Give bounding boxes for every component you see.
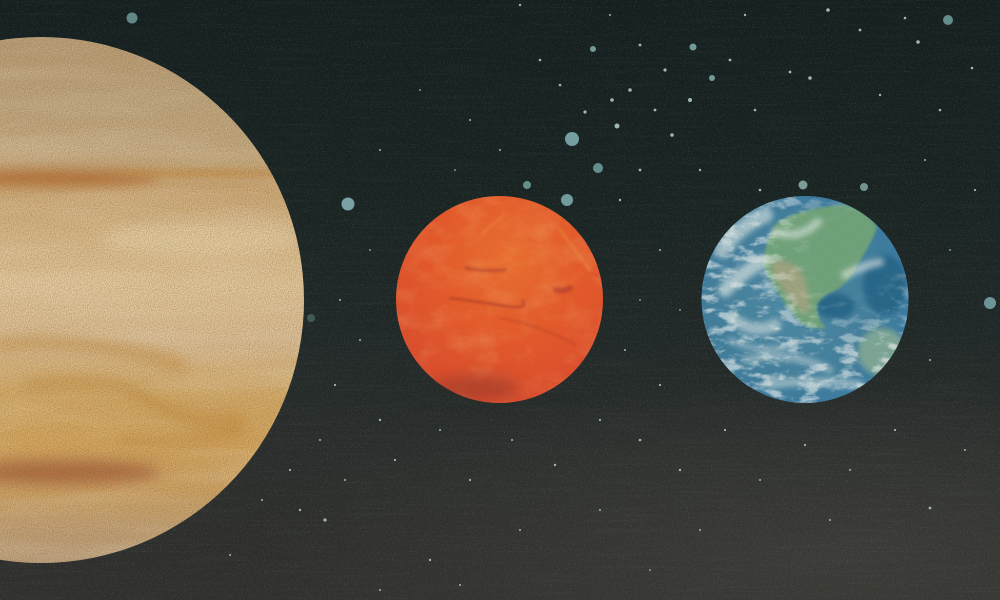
planet: Mars <box>395 195 605 405</box>
orange upper cloud band <box>0 171 160 185</box>
dark blue Atlantic and Gulf <box>815 255 907 319</box>
South America landmass <box>858 328 906 376</box>
planet: Venus <box>0 37 304 563</box>
arid interior <box>770 261 809 315</box>
surface canyons <box>450 215 590 345</box>
planet: Earth <box>700 195 910 405</box>
dark southern region <box>430 376 520 400</box>
white cloud masses <box>722 215 880 385</box>
pale mid cloud band <box>100 224 300 256</box>
reddish lower cloud band <box>0 460 160 484</box>
golden lower swirls <box>0 342 240 441</box>
fine cloud texture <box>700 195 910 405</box>
North America landmass <box>763 205 877 328</box>
